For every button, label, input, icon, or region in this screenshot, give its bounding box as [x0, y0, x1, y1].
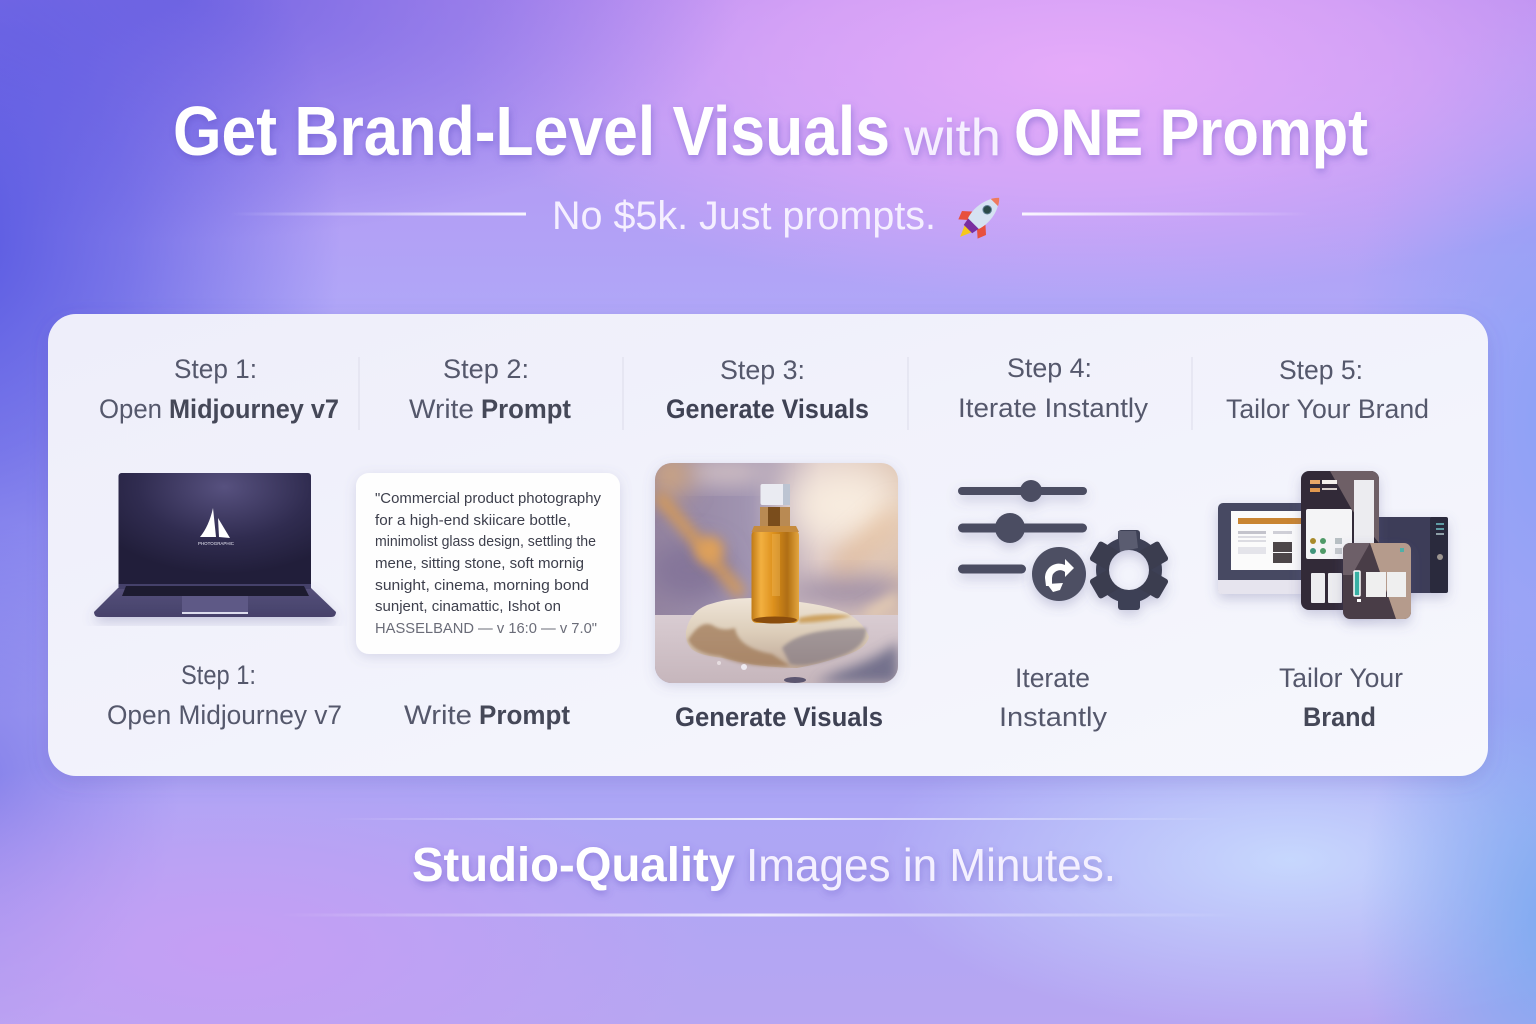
- card: prompt: sunjent, cinamattic, Ishot on: [375, 599, 561, 615]
- step headers: Step 5:: [1279, 355, 1363, 385]
- icon: devices: [1218, 471, 1448, 619]
- card: prompt: for a high-end skiicare bottle,: [375, 513, 571, 529]
- right panel: [1375, 517, 1448, 593]
- step headers: Step 3:: [720, 355, 805, 385]
- icon: refresh: [1032, 547, 1086, 601]
- icon: rocket: [948, 186, 1011, 249]
- card: prompt: "Commercial product photography: [375, 491, 602, 507]
- step captions: Instantly: [999, 702, 1108, 732]
- tagline: Studio-Quality: [412, 839, 735, 892]
- step headers: Step 4:: [1007, 353, 1092, 383]
- step headers: Step 1:: [174, 354, 257, 384]
- step captions: Brand: [1303, 702, 1376, 732]
- icon: sliders: [958, 480, 1087, 574]
- step headers: [99, 353, 1429, 424]
- step headers: Generate Visuals: [666, 394, 869, 424]
- step headers: Step 2:: [443, 354, 529, 384]
- title: [173, 92, 1368, 170]
- step headers: Iterate Instantly: [958, 393, 1149, 423]
- step captions: Step 1:: [181, 660, 256, 690]
- step captions: Generate Visuals: [675, 702, 883, 732]
- tablet: [1301, 471, 1379, 610]
- step headers: Prompt: [481, 394, 571, 424]
- card: prompt: [356, 473, 620, 654]
- step captions: Tailor Your: [1279, 663, 1403, 693]
- card: prompt: sunight, cinema, morning bond: [375, 578, 589, 594]
- logo: sail: PHOTOGRAPHIC: [198, 541, 235, 546]
- step headers: Tailor Your Brand: [1226, 394, 1429, 424]
- subtitle: No $5k. Just prompts.: [552, 194, 936, 238]
- step captions: Iterate: [1015, 663, 1090, 693]
- card: prompt: minimolist glass design, settling the: [375, 534, 596, 550]
- step captions: Prompt: [479, 700, 570, 730]
- step headers: Open: [99, 394, 162, 424]
- logo: sail: [198, 508, 235, 546]
- step headers: Write: [409, 394, 474, 424]
- card: prompt: HASSELBAND — v 16:0 — v 7.0": [375, 621, 597, 637]
- icon: gear: [1089, 530, 1169, 610]
- image: product photo: [648, 451, 910, 683]
- panel: steps: [48, 314, 1488, 776]
- step captions: Write: [404, 700, 472, 730]
- step captions: Open Midjourney v7: [107, 700, 342, 730]
- title: with: [903, 109, 1001, 167]
- tagline: Images in Minutes.: [746, 839, 1116, 891]
- subtitle: [230, 194, 1312, 238]
- title: Get Brand-Level Visuals: [173, 92, 890, 170]
- tagline: [280, 818, 1240, 916]
- card: prompt: mene, sitting stone, soft mornig: [375, 556, 584, 572]
- step headers: Midjourney v7: [169, 394, 339, 424]
- step captions: [107, 660, 1403, 732]
- title: ONE Prompt: [1014, 95, 1368, 169]
- monitor: [1218, 503, 1308, 594]
- bottle: [752, 484, 799, 624]
- small card: [1343, 543, 1411, 619]
- icon: laptop: [94, 473, 336, 617]
